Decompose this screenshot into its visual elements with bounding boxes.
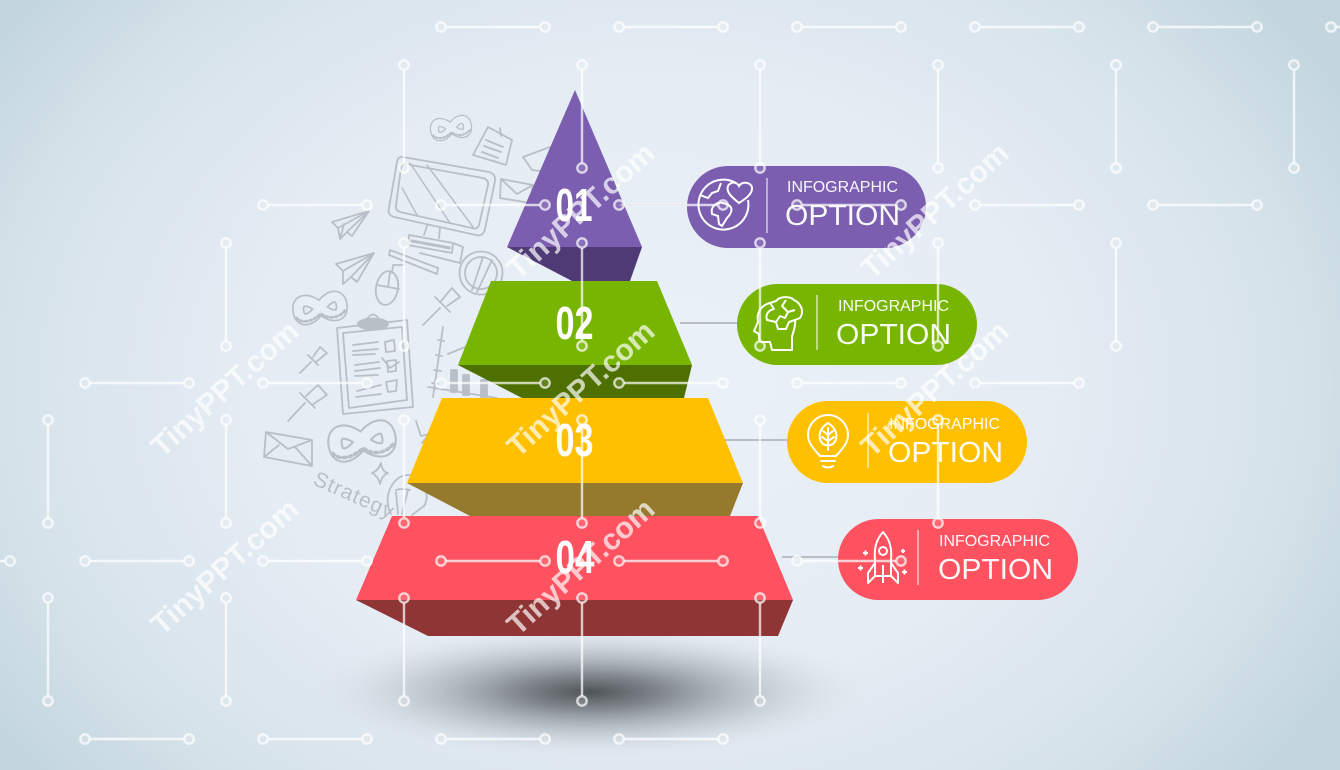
icon: globe with heart — [698, 180, 752, 230]
option pill 1 — [687, 166, 926, 248]
doodle: mouse — [373, 265, 404, 307]
pyramid — [356, 90, 793, 636]
option pill 1: OPTION — [785, 200, 900, 232]
icon: bulb with leaf — [808, 415, 848, 468]
option pill 1: INFOGRAPHIC — [787, 179, 898, 196]
watermarks: TinyPPT.com — [501, 493, 661, 642]
ground shadow — [305, 624, 875, 760]
doodle: prohibition sign — [460, 252, 502, 294]
pyramid level 3 — [407, 398, 743, 516]
watermarks: TinyPPT.com — [145, 315, 305, 464]
pyramid level 1: 01 — [556, 179, 592, 231]
pyramid level 2: 02 — [556, 297, 594, 349]
doodle: star and letter — [372, 421, 429, 484]
icon: head with puzzle — [754, 297, 802, 350]
option pill 4: INFOGRAPHIC — [939, 533, 1050, 550]
option pill 2 — [737, 284, 977, 365]
option pill 2: INFOGRAPHIC — [838, 298, 949, 315]
watermarks: TinyPPT.com — [145, 493, 305, 642]
doodle: infinity tokens — [294, 118, 471, 459]
doodle: paper planes — [332, 147, 550, 284]
watermarks: TinyPPT.com — [855, 315, 1015, 464]
watermarks — [145, 137, 1015, 642]
doodle: sticky note — [473, 127, 512, 165]
option pill 3 — [787, 401, 1027, 483]
doodle: strategy word: Strategy — [310, 468, 398, 524]
option pill 4 — [838, 519, 1078, 600]
pyramid level 1 — [507, 90, 642, 281]
pyramid level 2 — [458, 281, 692, 398]
pyramid level 4 — [356, 516, 793, 636]
option pill 4: OPTION — [938, 554, 1053, 586]
icon: rocket — [858, 532, 907, 583]
watermarks: TinyPPT.com — [855, 137, 1015, 286]
doodle: envelopes — [264, 179, 533, 466]
watermarks: TinyPPT.com — [501, 137, 661, 286]
doodle: light bulb — [388, 475, 427, 515]
watermarks: TinyPPT.com — [501, 315, 661, 464]
doodle: clipboard — [337, 314, 413, 414]
doodle: push pins — [288, 288, 460, 421]
pyramid level 4: 04 — [556, 531, 595, 583]
option pill 2: OPTION — [836, 319, 951, 351]
doodle: monitor — [389, 157, 495, 274]
connector lines — [620, 205, 838, 557]
doodle: bar chart and ruler — [428, 327, 497, 398]
option pill 3: INFOGRAPHIC — [889, 416, 1000, 433]
option pill 3: OPTION — [888, 437, 1003, 469]
doodle illustration — [264, 118, 550, 524]
pyramid level 3: 03 — [556, 414, 594, 466]
